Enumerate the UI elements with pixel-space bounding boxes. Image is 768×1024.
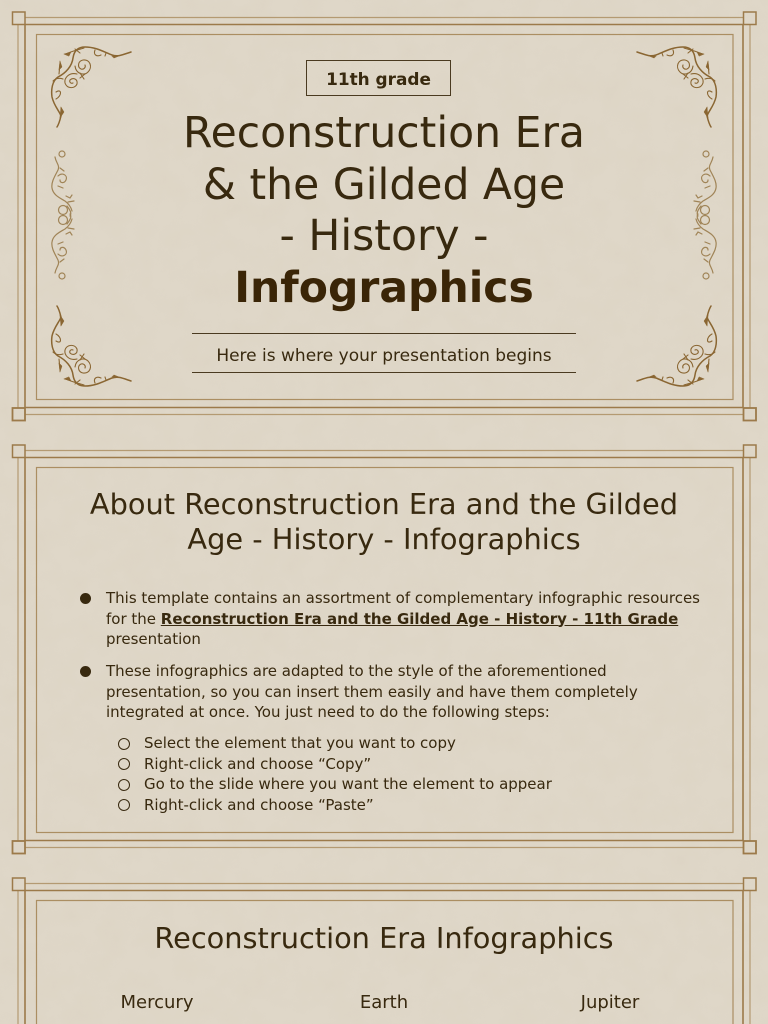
subtitle with rules: [192, 333, 576, 373]
ornaments: corners and sides of title slide: [52, 47, 716, 386]
title: Reconstruction Era: [183, 109, 585, 158]
paragraph 1: for the Reconstruction Era and the Gilded Age - History - 11th Grade: [106, 610, 678, 628]
grade badge: 11th grade: [326, 69, 431, 89]
paragraph 1: [106, 589, 700, 648]
title: - History -: [280, 212, 488, 261]
bullet 2: [80, 666, 91, 677]
about body text: [80, 589, 700, 814]
paragraph 1: presentation: [106, 630, 201, 648]
planet labels: Jupiter: [581, 992, 639, 1013]
slide frame 1: [12, 12, 756, 420]
steps: Right-click and choose “Copy”: [144, 754, 371, 772]
grade badge: [306, 60, 451, 96]
paragraph 1: This template contains an assortment of complementary infographic resources: [106, 589, 700, 607]
subtitle with rules: Here is where your presentation begins: [216, 346, 552, 366]
slide frame 2: [12, 445, 756, 854]
title: [183, 109, 585, 313]
about heading: Age - History - Infographics: [187, 522, 581, 556]
steps: Select the element that you want to copy: [144, 734, 456, 752]
slide frame 3: [12, 878, 756, 1024]
title: & the Gilded Age: [203, 161, 565, 210]
steps: Right-click and choose “Paste”: [144, 796, 374, 814]
section heading: Reconstruction Era Infographics: [154, 921, 614, 955]
planet labels: [121, 992, 640, 1013]
planet labels: Earth: [360, 992, 408, 1013]
paragraph 2: integrated at once. You just need to do the following steps:: [106, 703, 550, 721]
about heading: About Reconstruction Era and the Gilded: [90, 487, 678, 521]
step bullets: [118, 738, 130, 811]
paragraph 2: These infographics are adapted to the style of the aforementioned: [106, 662, 607, 680]
bullet 1: [80, 593, 91, 604]
title: Infographics: [234, 264, 534, 313]
planet labels: Mercury: [121, 992, 193, 1013]
steps: [144, 734, 552, 814]
paragraph 2: [106, 662, 638, 721]
paragraph 2: presentation, so you can insert them easily and have them completely: [106, 682, 638, 700]
steps: Go to the slide where you want the element to appear: [144, 775, 552, 793]
about heading: [90, 487, 678, 556]
